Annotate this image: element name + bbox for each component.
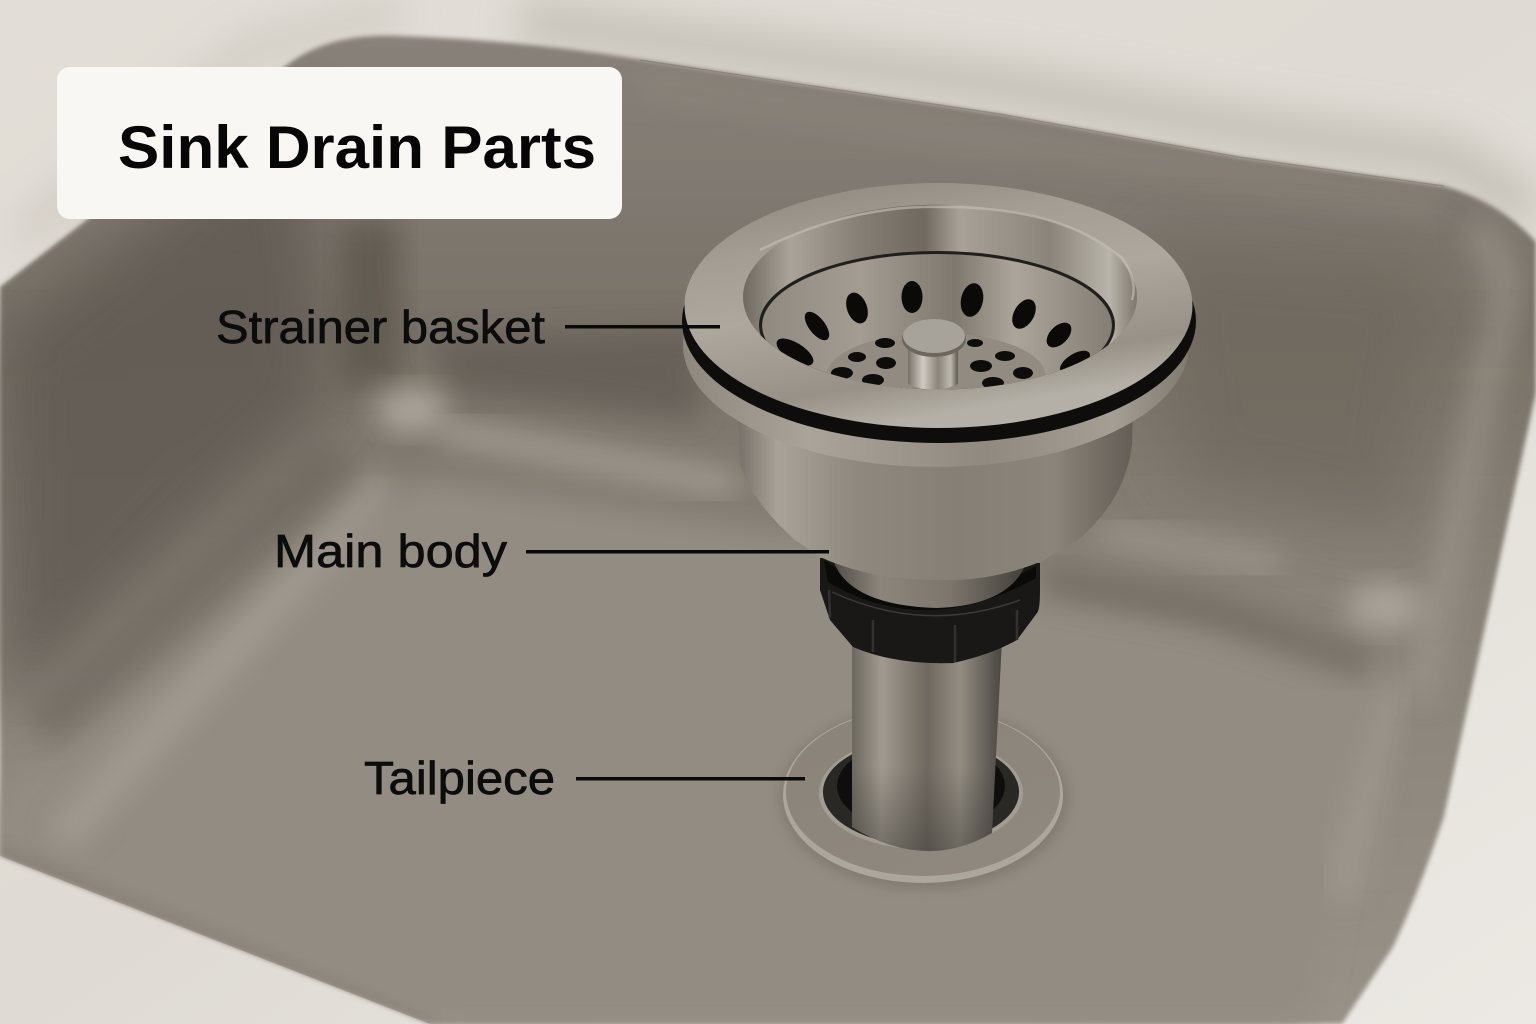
tailpiece base flange — [780, 707, 1068, 889]
strainer basket — [759, 251, 1115, 390]
strainer flange — [682, 183, 1196, 467]
leader line: main body — [526, 550, 829, 554]
ridge highlights — [376, 388, 448, 432]
main body — [738, 405, 1133, 608]
basin upper band — [640, 85, 1440, 205]
title card — [57, 67, 622, 219]
label: strainer basket — [216, 301, 720, 353]
leader line: tailpiece — [576, 777, 805, 780]
floor ridge dark — [1040, 580, 1370, 665]
black coupling nut — [820, 558, 1040, 663]
seam line — [640, 60, 1444, 186]
leader line: strainer basket — [565, 325, 720, 328]
basin lower edge — [0, 850, 430, 1024]
vertical wall shadow — [340, 220, 400, 390]
tailpiece pipe — [852, 640, 1002, 851]
label: main body — [274, 525, 829, 577]
black gasket — [682, 199, 1196, 443]
basin floor — [0, 480, 1376, 1024]
lower lip — [683, 223, 1189, 467]
slots — [772, 281, 1094, 378]
countertop shading above basin — [20, 10, 1536, 240]
right wall shadow — [1182, 252, 1410, 520]
title: Sink Drain Parts — [118, 114, 596, 181]
left wall shadow — [0, 219, 334, 725]
label: tailpiece — [364, 752, 805, 804]
top ring — [684, 183, 1192, 428]
label: strainer basket: Strainer basket — [216, 301, 545, 353]
center knob — [902, 319, 966, 390]
label: main body: Main body — [274, 525, 507, 577]
inner bowl — [743, 204, 1137, 390]
back wall shadow — [430, 330, 700, 420]
label: tailpiece: Tailpiece — [364, 752, 555, 804]
inner disc — [828, 334, 1045, 390]
